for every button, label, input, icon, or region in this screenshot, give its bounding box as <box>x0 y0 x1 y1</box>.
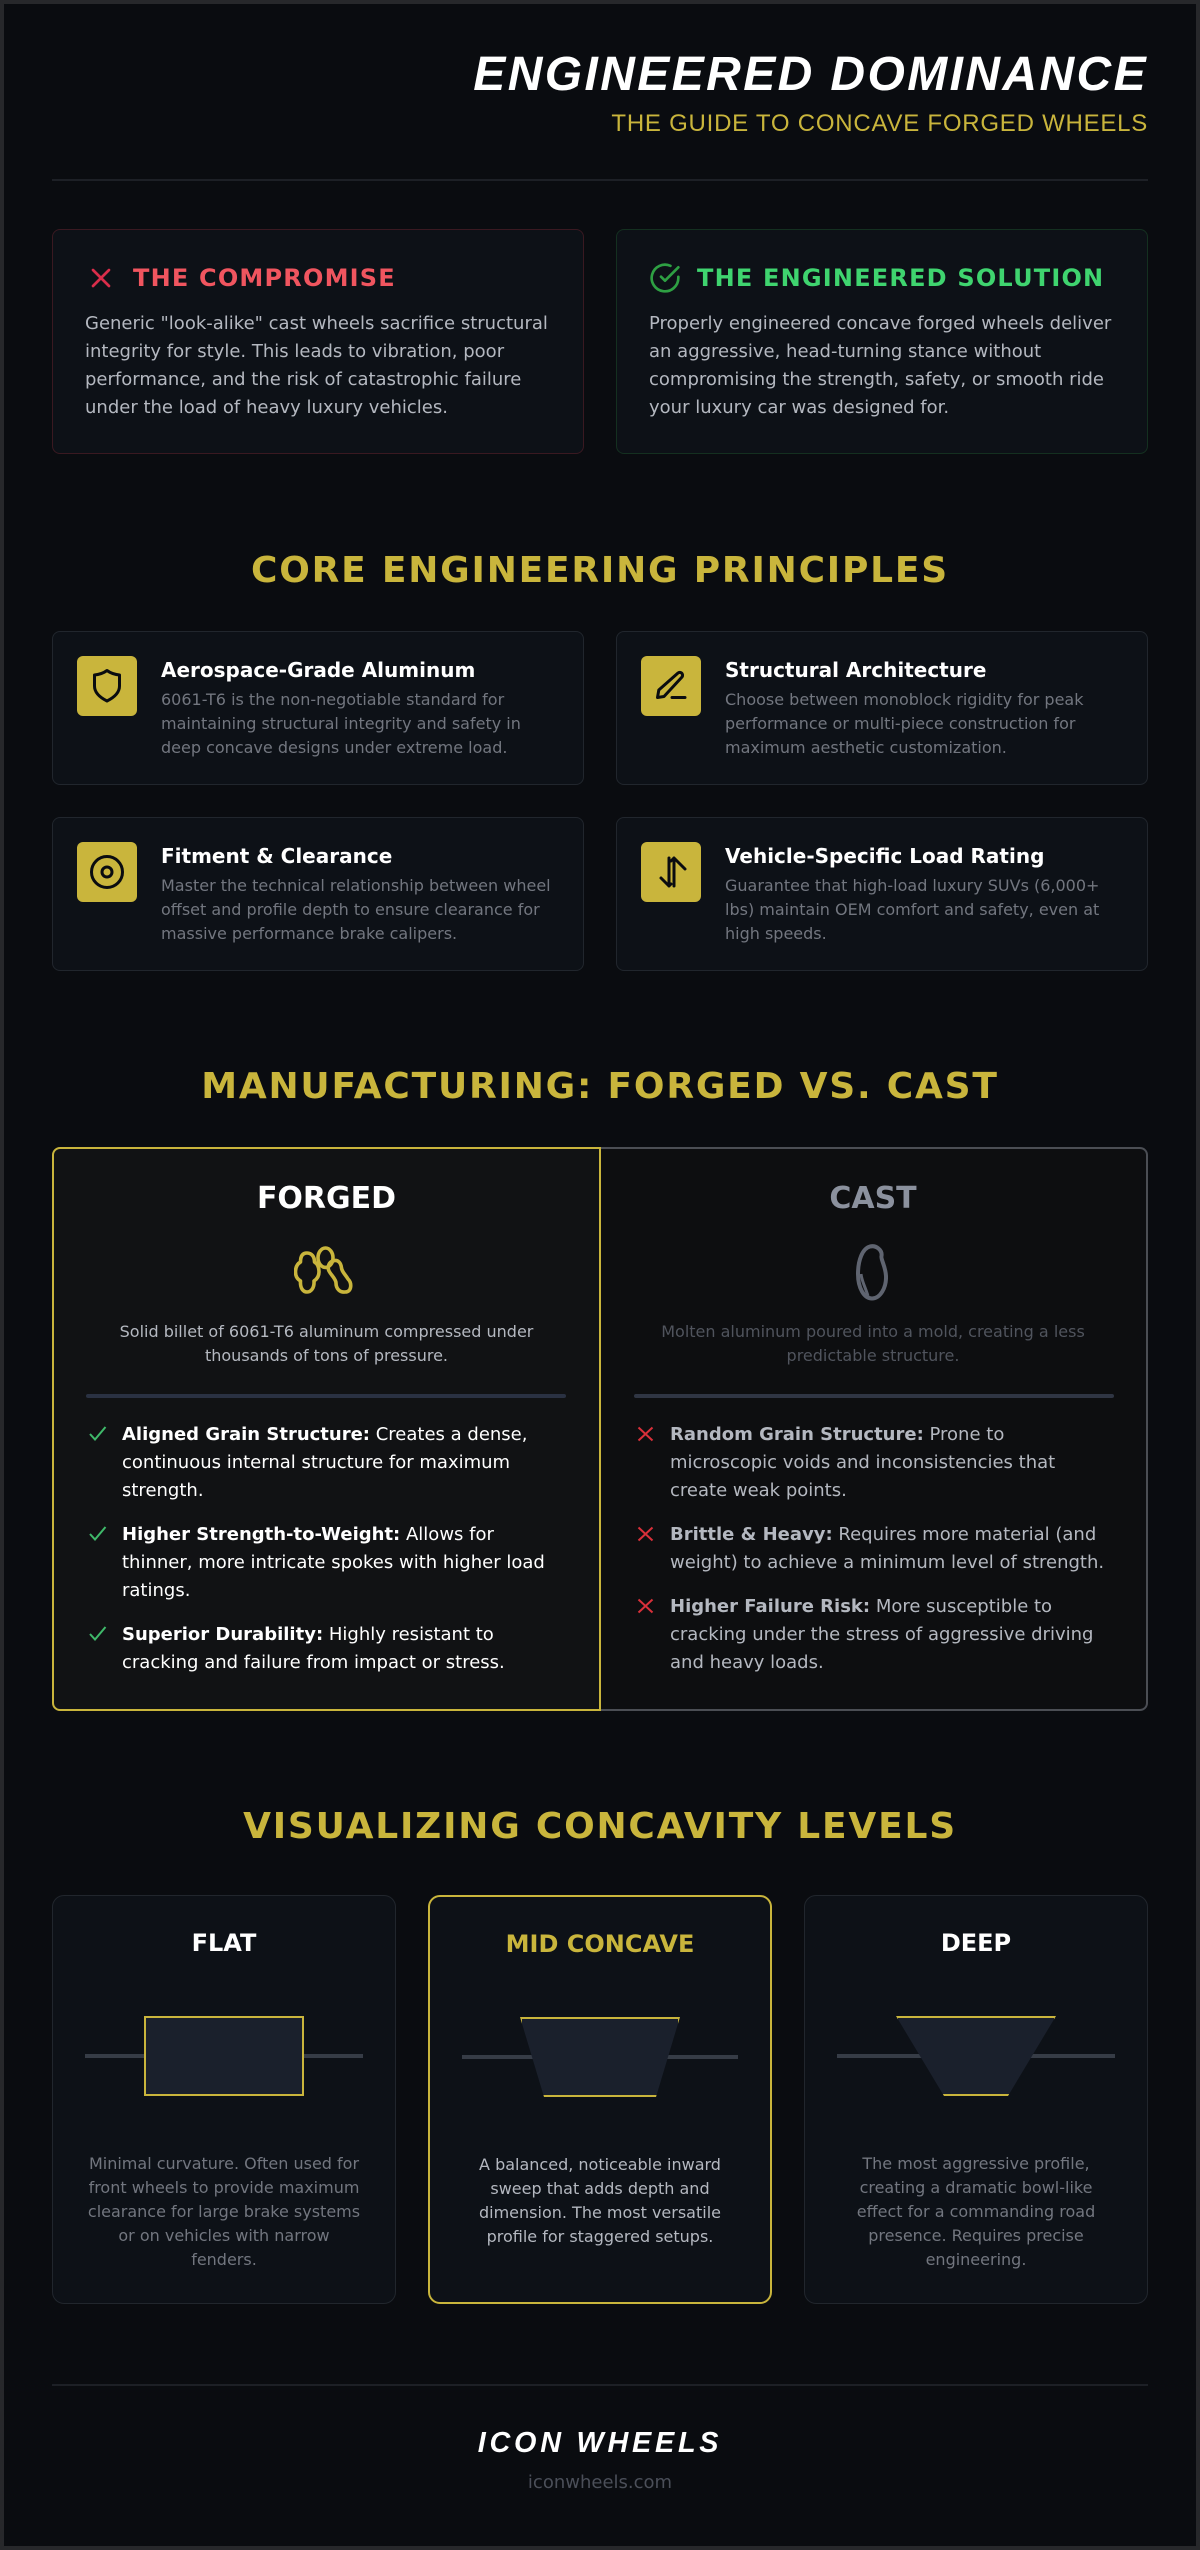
text: deep description: effect for a commanding road <box>857 2202 1095 2221</box>
panel: forged <box>52 1147 601 1711</box>
heading: the compromise: THE COMPROMISE <box>133 264 396 292</box>
text: cast description: Molten aluminum poured into a mold, creating a less <box>661 1322 1085 1341</box>
panel: the engineered solution <box>616 229 1148 454</box>
list item <box>89 1424 527 1501</box>
panel: structural architecture <box>616 631 1148 785</box>
text: solution body: compromising the strength, safety, or smooth ride <box>649 369 1104 390</box>
heading: flat: FLAT <box>192 1929 256 1957</box>
icon: pen <box>641 656 701 716</box>
text: flat description: Minimal curvature. Often used for <box>89 2154 359 2173</box>
text: flat description: or on vehicles with narrow <box>118 2226 330 2245</box>
text: Master the technical relationship between wheel <box>161 876 551 895</box>
list item: Higher Failure Risk: More susceptible to <box>670 1596 1052 1617</box>
text: mid concave description: profile for staggered setups. <box>487 2227 713 2246</box>
panel: aerospace-grade aluminum <box>52 631 584 785</box>
text: mid concave description <box>479 2155 721 2246</box>
diagram: deep profile <box>837 2016 1115 2096</box>
heading: visualizing concavity levels: VISUALIZING CONCAVITY LEVELS <box>243 1806 957 1847</box>
heading: the engineered solution: THE ENGINEERED SOLUTION <box>697 264 1104 292</box>
text: deep description <box>857 2154 1095 2269</box>
text <box>161 690 521 757</box>
heading: forged: FORGED <box>257 1181 396 1216</box>
heading: manufacturing forged vs cast: MANUFACTURING: FORGED VS. CAST <box>201 1066 999 1107</box>
text: lbs) maintain OEM comfort and safety, even at <box>725 900 1099 919</box>
text: deep description: The most aggressive profile, <box>862 2154 1090 2173</box>
panel: cast <box>600 1147 1148 1711</box>
heading: core engineering principles: CORE ENGINEERING PRINCIPLES <box>251 550 949 591</box>
text: mid concave description: sweep that adds depth and <box>490 2179 710 2198</box>
header rule <box>52 179 1148 181</box>
icon: x mark <box>92 268 110 288</box>
list item: Random Grain Structure: Prone to <box>670 1424 1004 1445</box>
title: ENGINEERED DOMINANCE <box>473 48 1148 101</box>
text: compromise body: Generic "look-alike" cast wheels sacrifice structural <box>85 313 548 334</box>
list item: cracking under the stress of aggressive driving <box>670 1624 1093 1645</box>
panel: flat <box>52 1895 396 2304</box>
list item <box>89 1624 505 1673</box>
text: solution body: an aggressive, head-turning stance without <box>649 341 1041 362</box>
text: compromise body <box>85 313 548 418</box>
text <box>161 876 551 943</box>
list item: Superior Durability: Highly resistant to <box>122 1624 494 1645</box>
footer url: iconwheels.com <box>528 2472 672 2493</box>
text: solution body: Properly engineered concave forged wheels deliver <box>649 313 1111 334</box>
text: high speeds. <box>725 924 827 943</box>
panel: the compromise <box>52 229 584 454</box>
list item: ratings. <box>122 1580 190 1601</box>
text: maximum aesthetic customization. <box>725 738 1007 757</box>
icon: check <box>89 1426 106 1441</box>
icon: check circle <box>650 263 680 293</box>
text: forged description <box>120 1322 534 1365</box>
text: cast description <box>661 1322 1085 1365</box>
subtitle: THE GUIDE TO CONCAVE FORGED WHEELS <box>611 110 1148 137</box>
list item <box>638 1596 1093 1673</box>
icon: cast blob <box>856 1244 888 1300</box>
text: offset and profile depth to ensure clearance for <box>161 900 540 919</box>
divider <box>86 1394 566 1398</box>
heading: Vehicle-Specific Load Rating <box>725 844 1044 868</box>
list item: thinner, more intricate spokes with higher load <box>122 1552 545 1573</box>
heading: cast: CAST <box>829 1181 917 1216</box>
text: solution body: your luxury car was designed for. <box>649 397 949 418</box>
panel: fitment and clearance <box>52 817 584 971</box>
text: deep description: presence. Requires precise <box>868 2226 1084 2245</box>
text <box>725 876 1099 943</box>
text: forged description: Solid billet of 6061-T6 aluminum compressed under <box>120 1322 533 1341</box>
text: flat description: front wheels to provide maximum <box>89 2178 359 2197</box>
list item: strength. <box>122 1480 204 1501</box>
text: deep description: creating a dramatic bowl-like <box>860 2178 1092 2197</box>
icon: forged grain <box>294 1246 353 1294</box>
heading: Structural Architecture <box>725 658 986 682</box>
footer rule <box>52 2384 1148 2386</box>
list item: create weak points. <box>670 1480 847 1501</box>
text: deep concave designs under extreme load. <box>161 738 507 757</box>
text: 6061-T6 is the non-negotiable standard for <box>161 690 504 709</box>
list item: cracking and failure from impact or stress. <box>122 1652 505 1673</box>
heading: Aerospace-Grade Aluminum <box>161 658 475 682</box>
list item: Brittle & Heavy: Requires more material (and <box>670 1524 1096 1545</box>
divider <box>634 1394 1114 1398</box>
panel: deep <box>804 1895 1148 2304</box>
text: Choose between monoblock rigidity for peak <box>725 690 1083 709</box>
list item <box>89 1524 545 1601</box>
list item: microscopic voids and inconsistencies that <box>670 1452 1055 1473</box>
diagram: mid concave profile <box>462 2017 738 2097</box>
icon: cross <box>638 1598 654 1614</box>
list item: Higher Strength-to-Weight: Allows for <box>122 1524 494 1545</box>
list item: Aligned Grain Structure: Creates a dense, <box>122 1424 527 1445</box>
text: mid concave description: A balanced, noticeable inward <box>479 2155 721 2174</box>
text: compromise body: under the load of heavy luxury vehicles. <box>85 397 448 418</box>
panel: vehicle-specific load rating <box>616 817 1148 971</box>
text: deep description: engineering. <box>926 2250 1026 2269</box>
heading: deep: DEEP <box>941 1929 1011 1957</box>
icon: cross <box>638 1526 654 1542</box>
heading: Fitment & Clearance <box>161 844 392 868</box>
list item <box>638 1424 1055 1501</box>
diagram: flat profile <box>85 2016 363 2096</box>
icon: target <box>77 842 137 902</box>
icon: up down arrows <box>641 842 701 902</box>
footer brand: ICON WHEELS <box>478 2427 722 2459</box>
icon: cross <box>638 1426 654 1442</box>
list item: continuous internal structure for maximum <box>122 1452 510 1473</box>
list item: and heavy loads. <box>670 1652 824 1673</box>
icon: check <box>89 1626 106 1641</box>
panel: mid concave <box>428 1895 772 2304</box>
text: flat description: fenders. <box>191 2250 257 2269</box>
list item <box>638 1524 1104 1573</box>
heading: mid concave: MID CONCAVE <box>506 1930 694 1958</box>
text: mid concave description: dimension. The most versatile <box>479 2203 721 2222</box>
icon: check <box>89 1526 106 1541</box>
text: cast description: predictable structure. <box>787 1346 959 1365</box>
text: Guarantee that high-load luxury SUVs (6,000+ <box>725 876 1099 895</box>
text: solution body <box>649 313 1112 418</box>
icon: shield <box>77 656 137 716</box>
list item: weight) to achieve a minimum level of strength. <box>670 1552 1104 1573</box>
text: flat description <box>88 2154 360 2269</box>
text <box>725 690 1084 757</box>
text: maintaining structural integrity and safety in <box>161 714 521 733</box>
text: performance or multi-piece construction for <box>725 714 1075 733</box>
text: massive performance brake calipers. <box>161 924 457 943</box>
text: compromise body: performance, and the risk of catastrophic failure <box>85 369 521 390</box>
text: forged description: thousands of tons of pressure. <box>205 1346 448 1365</box>
text: compromise body: integrity for style. This leads to vibration, poor <box>85 341 504 362</box>
text: flat description: clearance for large brake systems <box>88 2202 360 2221</box>
